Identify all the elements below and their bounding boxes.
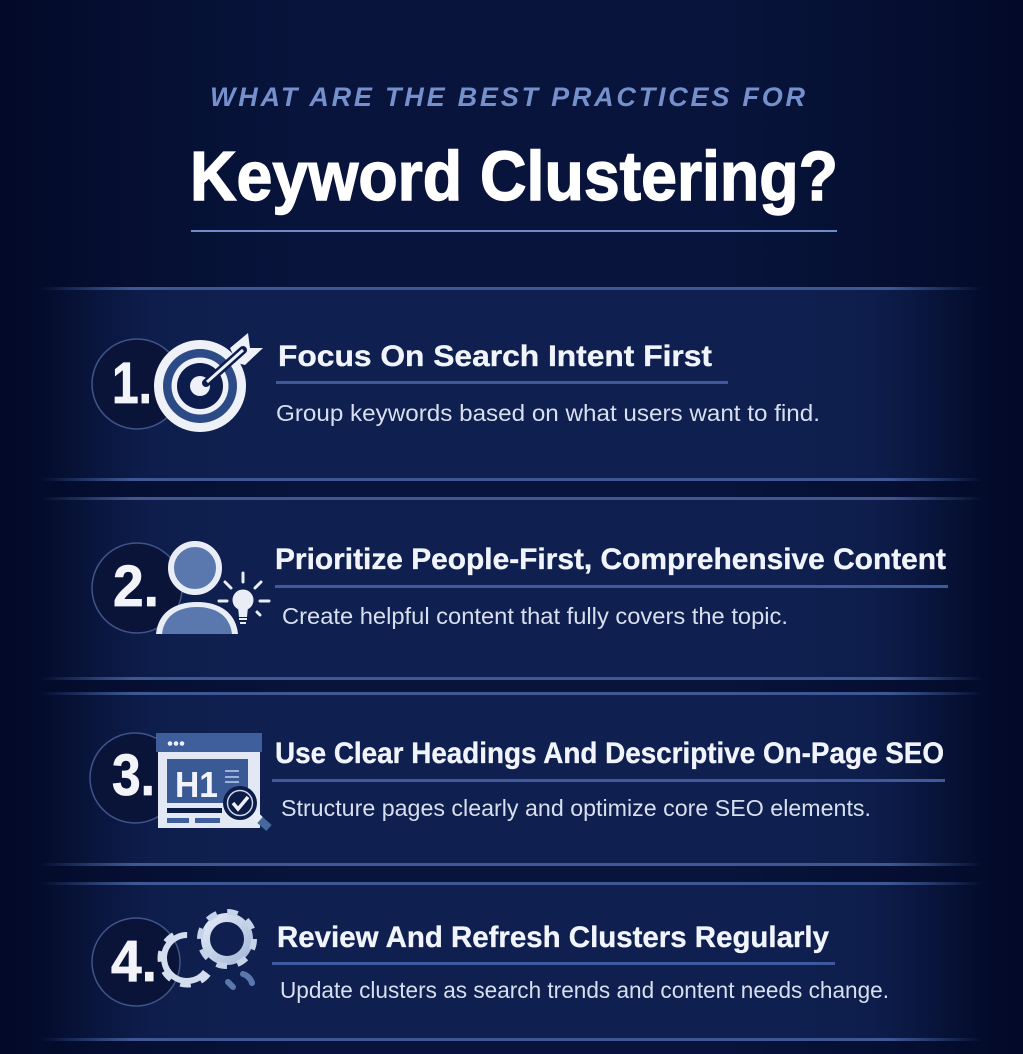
number badge 1: 1. bbox=[112, 351, 152, 416]
number badge 3 bbox=[90, 733, 180, 823]
heading 2: Prioritize People-First, Comprehensive Content bbox=[275, 543, 946, 576]
panel 4: review and refresh bbox=[40, 882, 983, 1041]
icon: target with arrow bbox=[154, 333, 263, 432]
heading rule 4 bbox=[272, 962, 835, 965]
panel 3: headings and on-page SEO bbox=[40, 692, 983, 866]
number badge 1 bbox=[92, 339, 182, 429]
number badge 2: 2. bbox=[113, 554, 159, 619]
title underline bbox=[191, 230, 837, 232]
icon: two gears bbox=[150, 912, 254, 995]
icon: browser page with H1 and magnifier bbox=[156, 733, 269, 828]
heading rule 3 bbox=[272, 779, 945, 782]
heading rule 1 bbox=[276, 381, 728, 384]
icon: person with light bulb bbox=[156, 544, 269, 634]
description 2: Create helpful content that fully covers the topic. bbox=[282, 603, 788, 629]
description 1: Group keywords based on what users want to find. bbox=[276, 400, 820, 426]
title: Keyword Clustering? bbox=[190, 137, 838, 215]
description 4: Update clusters as search trends and content needs change. bbox=[280, 977, 889, 1003]
number badge 3: 3. bbox=[112, 743, 155, 808]
number badge 4 bbox=[92, 918, 180, 1006]
heading rule 2 bbox=[275, 585, 948, 588]
heading 3: Use Clear Headings And Descriptive On-Page SEO bbox=[275, 737, 944, 770]
subtitle: WHAT ARE THE BEST PRACTICES FOR bbox=[210, 82, 806, 112]
panel 2: people-first content bbox=[40, 497, 983, 680]
number badge 4: 4. bbox=[111, 929, 157, 994]
panel 1: search intent bbox=[40, 287, 983, 481]
heading 4: Review And Refresh Clusters Regularly bbox=[277, 921, 829, 954]
heading 1: Focus On Search Intent First bbox=[278, 340, 712, 373]
icon: browser page with H1 and magnifier: H1 bbox=[175, 764, 218, 805]
description 3: Structure pages clearly and optimize core SEO elements. bbox=[281, 795, 871, 821]
number badge 2 bbox=[92, 543, 182, 633]
